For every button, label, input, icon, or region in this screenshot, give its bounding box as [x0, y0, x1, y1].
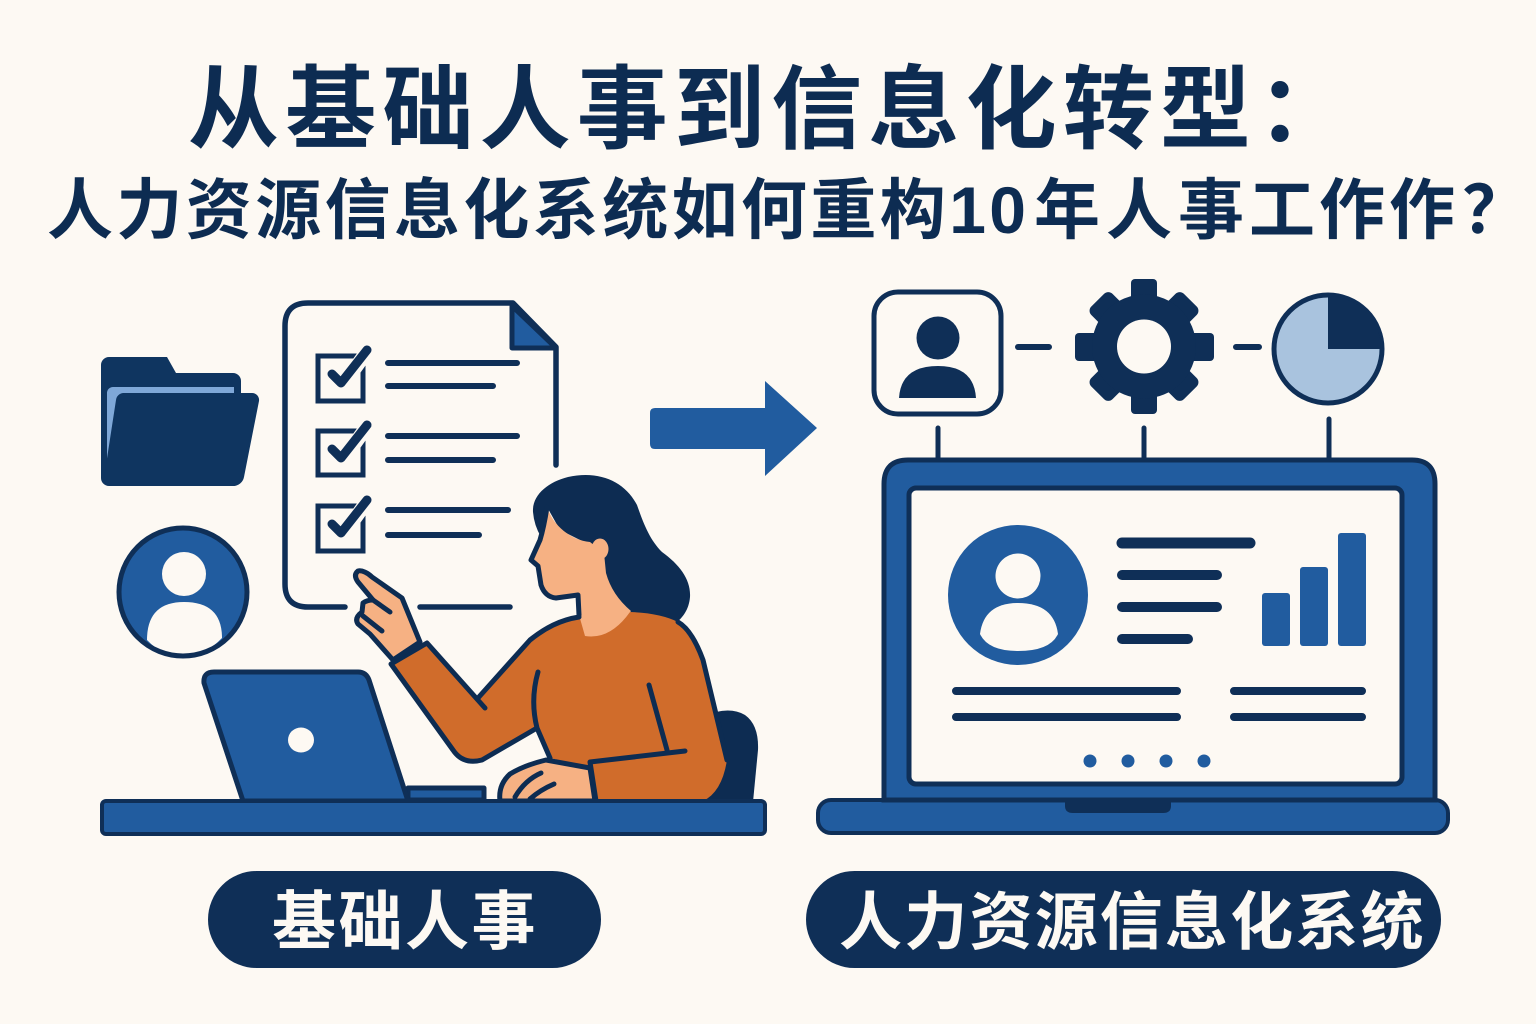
icon: user avatar — [119, 528, 247, 656]
person: woman pointing at document — [356, 475, 758, 802]
face and neck — [531, 507, 631, 638]
desk — [102, 801, 765, 834]
connector lines — [938, 419, 1329, 460]
label: basic HR: 基础人事 — [272, 886, 538, 958]
label: HR information system — [806, 871, 1441, 968]
laptop body and screen — [884, 460, 1435, 800]
sweater — [391, 612, 727, 801]
icon: checklist document — [285, 303, 556, 607]
face outline — [531, 507, 579, 615]
screen text lines — [956, 543, 1362, 717]
label: basic HR — [208, 871, 601, 968]
title line 2: ？ — [1462, 173, 1531, 247]
icon: folder — [101, 357, 259, 486]
title line 2: 工 — [1249, 173, 1318, 247]
title line 2: 人 — [1106, 173, 1175, 247]
chair — [700, 711, 758, 802]
title line 2: 年 — [1034, 173, 1103, 247]
arrow — [650, 381, 817, 476]
panel: basic HR illustration — [101, 303, 765, 834]
pointing hand — [356, 571, 420, 660]
bar chart — [1262, 533, 1366, 646]
title — [47, 60, 1531, 247]
panel: HR information system illustration — [818, 279, 1448, 833]
title line 2: 作 — [1389, 173, 1458, 247]
label: HR information system: 人力资源信息化系统 — [839, 888, 1426, 958]
connector dash — [1018, 344, 1259, 350]
pagination dots — [1084, 754, 1210, 768]
icon: pie chart — [1274, 295, 1382, 403]
laptop base — [818, 800, 1448, 833]
icon: user card — [874, 292, 1001, 414]
hair — [533, 475, 690, 622]
title line 1: 从基础人事到信息化转型： — [188, 60, 1354, 161]
icon: laptop on desk — [204, 672, 484, 801]
title line 2: 人力资源信息化系统如何重构10 — [47, 173, 1029, 247]
lower hand — [500, 760, 595, 801]
icon: gear — [1075, 279, 1214, 414]
ear — [592, 538, 608, 560]
title line 2: 作 — [1319, 173, 1388, 247]
title line 2: 事 — [1178, 173, 1247, 247]
screen avatar — [948, 525, 1088, 665]
